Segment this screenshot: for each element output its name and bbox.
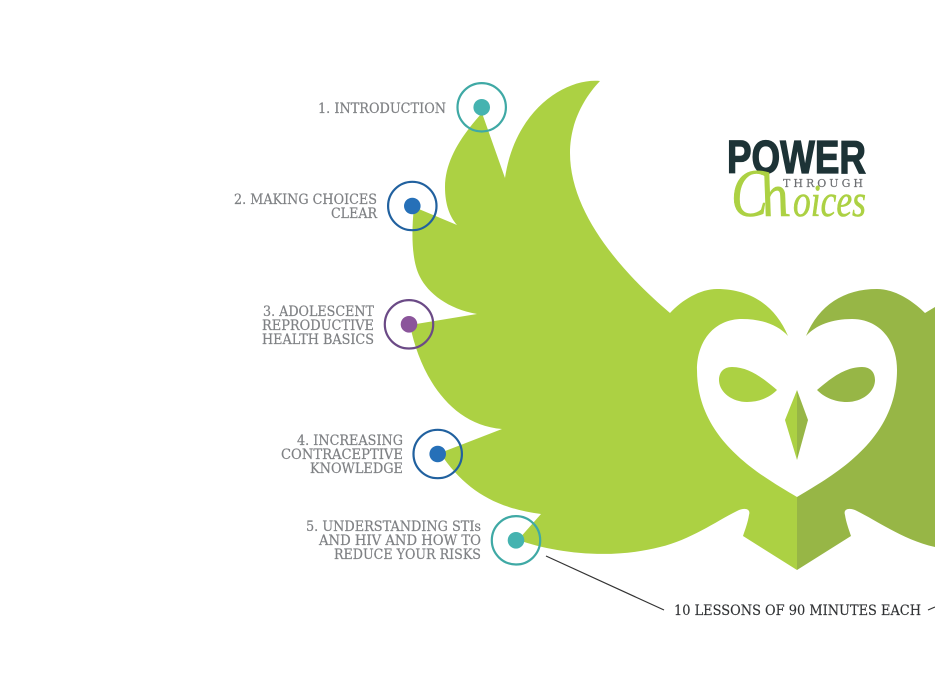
label: making choices clear	[234, 192, 378, 222]
label: increasing contraceptive knowledge: 4. INCREASING	[297, 433, 403, 449]
label: adolescent reproductive health basics	[262, 304, 374, 348]
logo word POWER: POWER	[727, 131, 866, 183]
marker ring 3	[385, 300, 433, 348]
logo word Choices: C	[731, 155, 769, 231]
marker dot 4	[429, 446, 446, 462]
label: making choices clear: 2. MAKING CHOICES	[234, 192, 377, 208]
lesson 2	[234, 182, 436, 230]
label: increasing contraceptive knowledge: CONTRACEPTIVE	[281, 447, 403, 463]
label: adolescent reproductive health basics: REPRODUCTIVE	[262, 318, 374, 334]
label: understanding STIs and HIV: AND HIV AND HOW TO	[318, 533, 481, 549]
lesson 1	[318, 83, 506, 132]
callout left leader line	[546, 556, 664, 610]
marker ring 4	[414, 430, 462, 478]
logo word THROUGH: THROUGH	[783, 177, 863, 190]
label: making choices clear: CLEAR	[331, 206, 378, 222]
logo word Choices: h	[753, 161, 795, 230]
marker dot 3	[401, 316, 417, 333]
lesson 4	[281, 430, 462, 478]
label: understanding STIs and HIV: REDUCE YOUR RISKS	[334, 547, 481, 563]
owl right half	[797, 289, 935, 570]
owl beak right	[797, 390, 808, 460]
marker ring 1	[458, 83, 506, 132]
label: increasing contraceptive knowledge: KNOWLEDGE	[310, 461, 403, 477]
logo word Choices: oices	[793, 176, 866, 226]
callout right leader line	[928, 607, 935, 610]
label: adolescent reproductive health basics: 3. ADOLESCENT	[263, 304, 374, 320]
label: adolescent reproductive health basics: HEALTH BASICS	[262, 332, 374, 348]
owl left half with wing	[410, 81, 797, 570]
label: understanding STIs and HIV: 5. UNDERSTANDING STIs	[306, 519, 481, 535]
marker dot 2	[404, 198, 421, 214]
marker ring 2	[388, 182, 436, 230]
marker dot 5	[508, 532, 524, 549]
owl left eye	[719, 367, 777, 402]
label: understanding STIs and HIV	[306, 519, 481, 563]
logo: Power Through Choices	[727, 131, 866, 231]
owl beak left	[785, 390, 797, 460]
lesson 3	[262, 300, 433, 348]
lesson 5	[306, 516, 540, 564]
label: introduction: 1. INTRODUCTION	[318, 101, 446, 117]
marker dot 1	[473, 99, 490, 116]
label: increasing contraceptive knowledge	[281, 433, 403, 477]
logo word Choices	[731, 155, 866, 231]
callout: 10 lessons of 90 minutes each	[546, 556, 935, 619]
owl illustration	[410, 81, 935, 570]
owl right eye	[817, 367, 875, 402]
marker ring 5	[492, 516, 540, 564]
